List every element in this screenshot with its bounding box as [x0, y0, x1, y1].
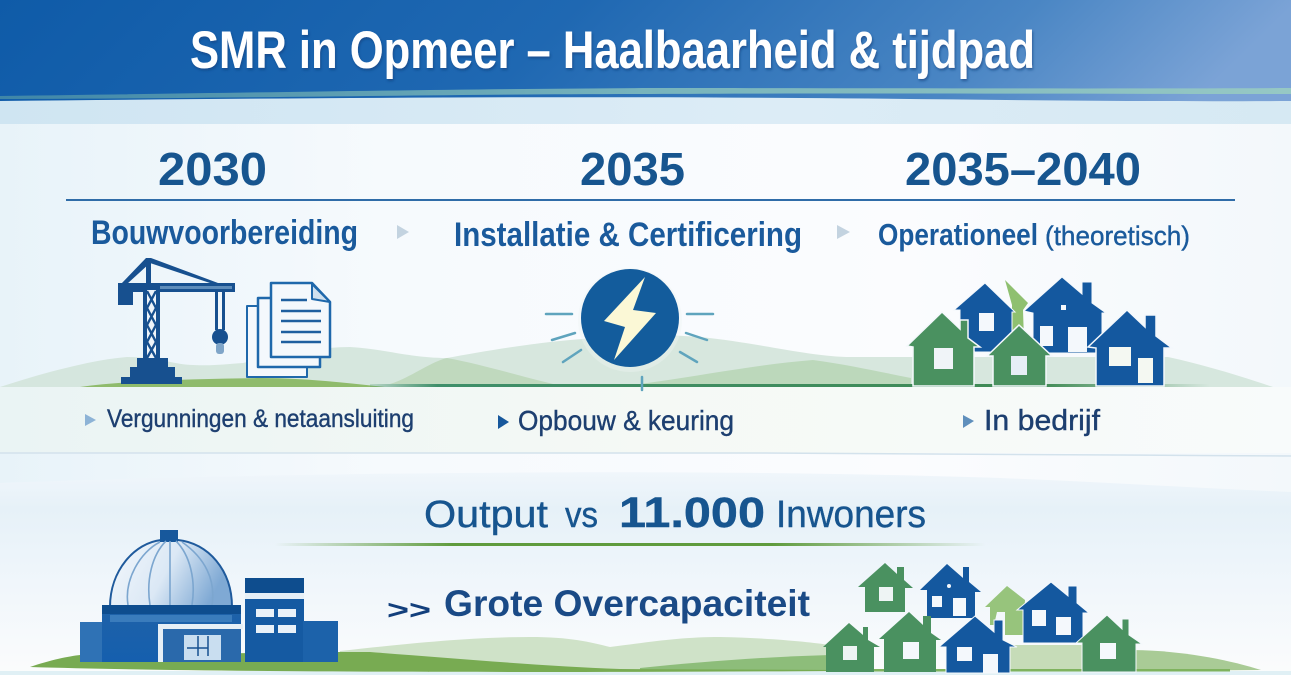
title: SMR in Opmeer – Haalbaarheid & tijdpad — [190, 21, 1035, 80]
year: 2035–2040: 2035–2040 — [905, 143, 1141, 195]
heading: Operationeel (theoretisch): (theoretisch) — [1045, 221, 1190, 251]
detail: Vergunningen & netaansluiting: Vergunningen & netaansluiting — [107, 405, 414, 433]
detail: In bedrijf: In bedrijf — [984, 405, 1101, 437]
heading: Operationeel (theoretisch) — [878, 217, 1190, 252]
year: 2035: 2035 — [580, 143, 685, 195]
icon: energy bolt — [546, 268, 713, 390]
arrow: phase 2 to 3 — [837, 225, 850, 239]
heading: Bouwvoorbereiding: Bouwvoorbereiding — [91, 214, 358, 252]
output heading — [424, 489, 926, 537]
landscape hills: output — [0, 637, 1291, 675]
landscape hills: timeline — [0, 335, 1273, 387]
timeline rule — [66, 199, 1235, 201]
arrow: phase 1 to 2 — [397, 225, 409, 239]
phase headings — [91, 214, 1190, 254]
output heading: Inwoners — [776, 494, 926, 536]
header banner — [0, 0, 1291, 101]
output heading: 11.000 — [619, 489, 765, 537]
heading: Operationeel (theoretisch): Operationeel — [878, 217, 1038, 252]
callout: Grote Overcapaciteit: >> — [387, 595, 431, 625]
icon: stacked documents — [247, 283, 330, 377]
icon: nuclear power plant — [80, 530, 338, 662]
year: 2030: 2030 — [158, 143, 267, 195]
green rule — [275, 543, 985, 546]
detail: Opbouw & keuring: Opbouw & keuring — [518, 405, 734, 436]
output heading: Output — [424, 494, 548, 536]
callout: Grote Overcapaciteit: Grote Overcapaciteit — [444, 583, 810, 624]
timeline years — [158, 143, 1141, 195]
light band under header — [0, 95, 1291, 124]
icon: construction crane — [118, 258, 235, 384]
lower section tint — [0, 472, 1291, 675]
section divider — [0, 453, 1291, 456]
icon: houses group bottom — [823, 563, 1142, 673]
strip behind phase details — [0, 387, 1291, 453]
icon: houses group top — [907, 277, 1172, 386]
heading: Installatie & Certificering: Installatie & Certificering — [454, 216, 802, 254]
output heading: vs — [565, 494, 598, 535]
phase detail labels — [85, 405, 1101, 437]
